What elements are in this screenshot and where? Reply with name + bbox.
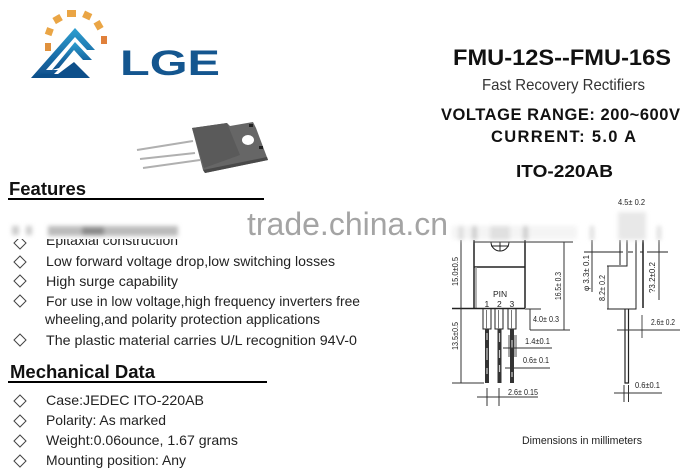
dimension labels: 2.6± 0.15 [508,387,538,397]
watermark: trade.china.cn [247,206,448,242]
package name: ITO-220AB [516,161,613,181]
dimension labels: 4.5± 0.2 [618,197,645,207]
dimension labels: 0.6±0.1 [635,380,660,390]
mechanical data list [14,392,238,468]
dimension lines [592,240,680,402]
dimension labels: 15.0±0.5 [450,257,460,286]
pins [483,309,517,383]
dimension labels: 8.2± 0.2 [597,275,607,301]
feature 3: High surge capability [46,273,178,289]
feature 1: Epitaxial construction [46,232,178,248]
mounting: Mounting position: Any [46,452,186,468]
dimension labels: 1.4±0.1 [525,336,550,346]
features list [14,232,360,348]
case: Case:JEDEC ITO-220AB [46,392,204,408]
feature 4 [14,293,360,327]
dimension labels: PIN [493,289,507,299]
feature 4: wheeling,and polarity protection applications [44,311,320,327]
blurred smudge band over text [0,224,200,239]
current: CURRENT: 5.0 A [491,128,636,146]
subtitle: Fast Recovery Rectifiers [482,77,645,94]
dimension labels: 2.6± 0.2 [651,317,675,327]
feature 4: For use in low voltage,high frequency inverters free [46,293,360,309]
heading: Features: Features [9,178,86,199]
feature 2: Low forward voltage drop,low switching losses [46,253,335,269]
package outline [584,240,668,383]
dimension labels: 1 [484,299,490,309]
voltage range: VOLTAGE RANGE: 200~600V [441,106,680,124]
title block [441,45,680,181]
icon: orange dots arc [45,10,107,51]
technical drawing: front view [452,240,573,406]
icon: blue triangles [31,28,95,78]
dimension labels: 0.6± 0.1 [523,355,549,365]
weight: Weight:0.06ounce, 1.67 grams [46,432,238,448]
feature 5: The plastic material carries U/L recognition 94V-0 [46,332,357,348]
logo: LGE [31,10,220,83]
dimension labels: 16.5± 0.3 [553,272,563,300]
dimension labels [450,197,675,397]
product photo: transistor [137,122,268,173]
logo wordmark: LGE [120,44,220,83]
dimension labels: 2 [497,299,502,309]
heading: Mechanical Data: Mechanical Data [10,361,156,382]
title: FMU-12S--FMU-16S [453,45,671,70]
dimension labels: φ 3.3± 0.1 [581,255,591,291]
dimension labels: ?3.2±0.2 [647,262,657,293]
caption: Dimensions in millimeters [522,435,642,447]
polarity: Polarity: As marked [46,412,166,428]
package body [452,240,573,308]
dimension labels: 4.0± 0.3 [533,314,559,324]
dimension lines [452,240,570,406]
blurred smudges over drawing [452,212,661,240]
dimension labels: 3 [510,299,514,309]
dimension labels: 13.5±0.5 [450,322,460,350]
technical drawing: side view [584,240,680,402]
